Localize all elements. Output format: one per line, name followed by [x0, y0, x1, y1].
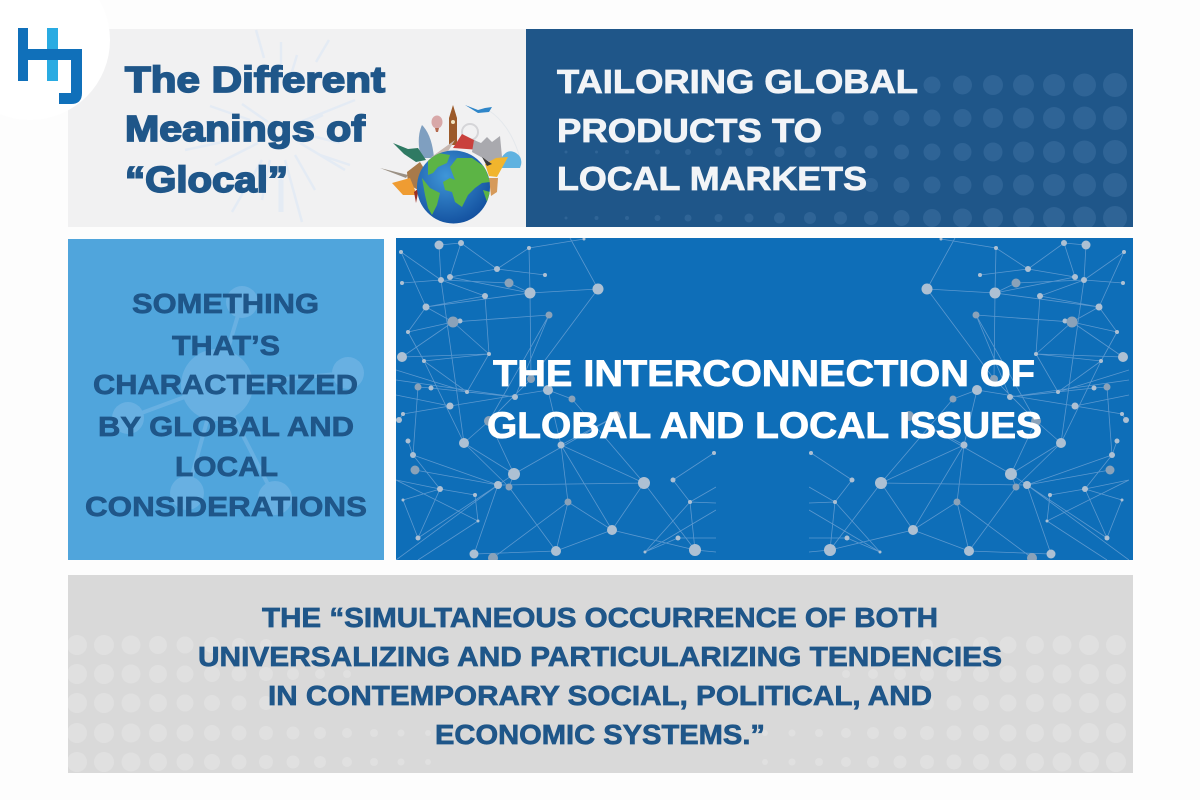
text: tailoring global products: [557, 63, 918, 197]
text: simultaneous occurrence: THE “SIMULTANEOUS OCCURRENCE OF BOTH: [262, 602, 938, 633]
heading: title text: [125, 59, 385, 200]
text: global and local considerations: SOMETHING: [132, 288, 319, 319]
text: tailoring global products: LOCAL MARKETS: [557, 160, 867, 197]
logo: HJ: [0, 0, 110, 120]
text: simultaneous occurrence: UNIVERSALIZING AND PARTICULARIZING TENDENCIES: [198, 641, 1002, 672]
panel: tailoring global products: [526, 29, 1133, 230]
text: global and local considerations: BY GLOBAL AND: [98, 411, 354, 442]
text: global and local considerations: LOCAL: [175, 451, 278, 482]
text: tailoring global products: PRODUCTS TO: [557, 112, 822, 149]
text: simultaneous occurrence: [198, 602, 1002, 750]
text: global and local considerations: [85, 288, 367, 522]
panel: title: [68, 29, 526, 227]
panel: global and local considerations: [68, 239, 384, 560]
icon: globe with landmarks: [380, 105, 522, 224]
text: global and local considerations: THAT’S: [172, 330, 280, 361]
network graphic right: [809, 238, 1129, 563]
heading: title text: The Different: [125, 59, 385, 100]
panel: interconnection of issues: [396, 238, 1133, 563]
text: simultaneous occurrence: IN CONTEMPORARY SOCIAL, POLITICAL, AND: [268, 680, 932, 711]
text: global and local considerations: CONSIDERATIONS: [85, 491, 367, 522]
heading: title text: “Glocal”: [125, 159, 288, 200]
network graphic left: [396, 238, 716, 563]
text: interconnection of issues: [487, 353, 1042, 446]
panel: simultaneous occurrence: [67, 575, 1133, 773]
text: simultaneous occurrence: ECONOMIC SYSTEMS.”: [435, 719, 765, 750]
text: tailoring global products: TAILORING GLOBAL: [557, 63, 918, 100]
heading: title text: Meanings of: [125, 108, 366, 149]
text: interconnection of issues: GLOBAL AND LOCAL ISSUES: [487, 405, 1042, 446]
text: interconnection of issues: THE INTERCONNECTION OF: [493, 353, 1035, 394]
text: global and local considerations: CHARACTERIZED: [93, 369, 358, 400]
